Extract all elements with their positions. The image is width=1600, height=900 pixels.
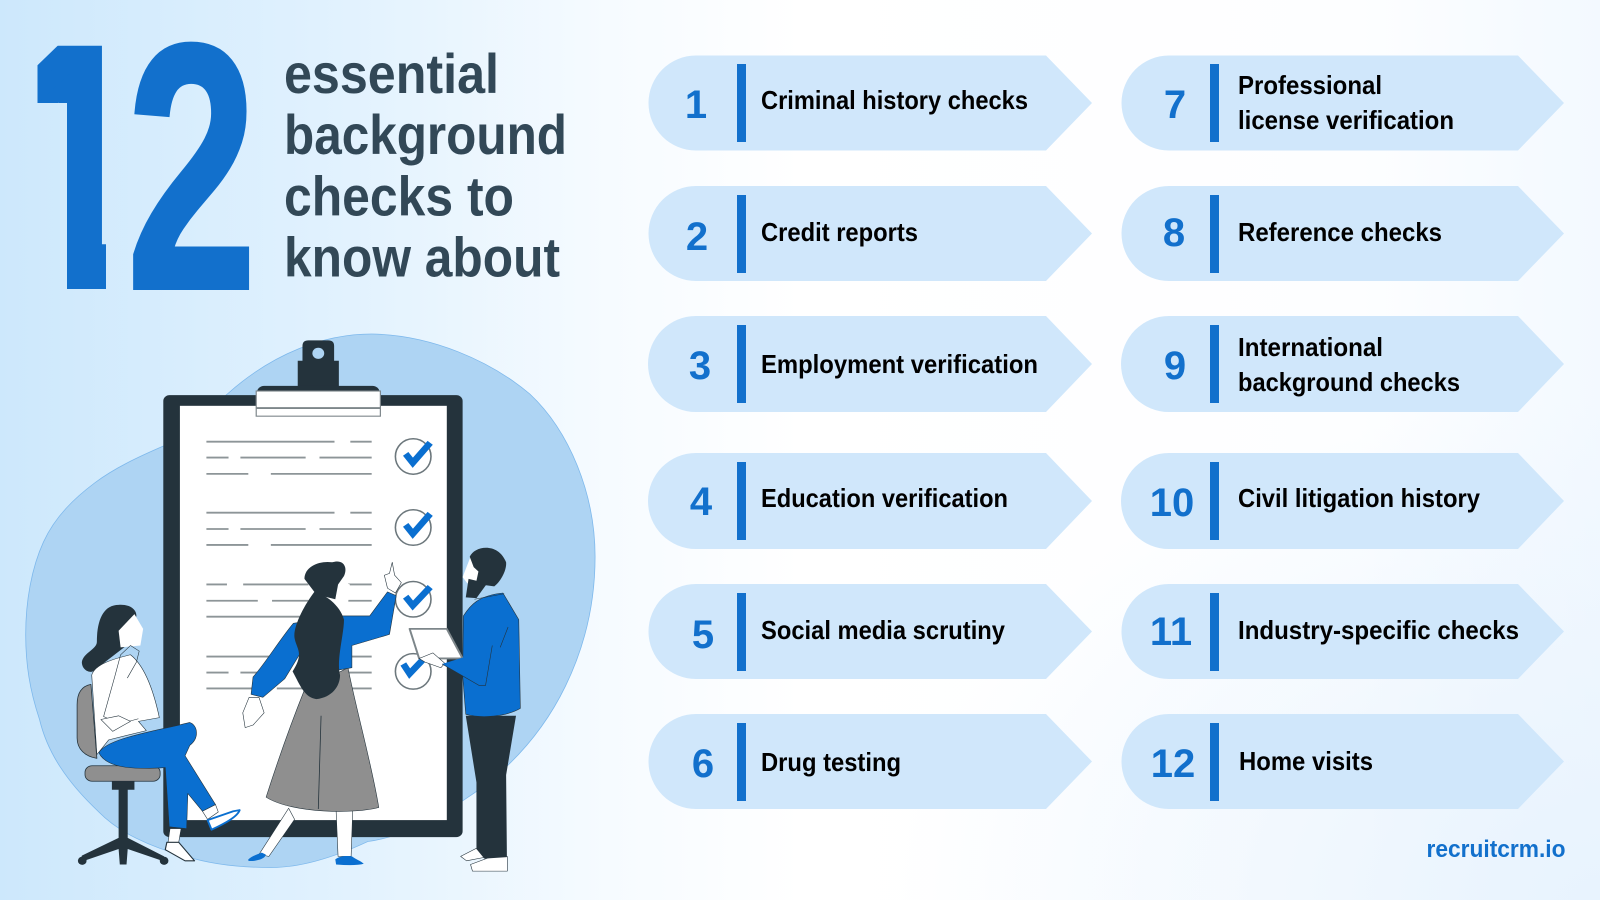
item 8 xyxy=(1122,186,1564,281)
item 2: Credit reports xyxy=(761,217,918,247)
checklist text lines xyxy=(206,442,372,688)
item 6: Drug testing xyxy=(761,747,901,777)
item 10: Civil litigation history xyxy=(1238,483,1480,513)
item 5 xyxy=(648,584,1092,679)
item 7: Professional xyxy=(1238,70,1382,100)
item 2: 2 xyxy=(686,215,708,259)
item 10 xyxy=(1121,453,1564,549)
item 12 xyxy=(1122,714,1564,809)
item 11 xyxy=(1122,584,1564,679)
item 9: International xyxy=(1238,332,1383,362)
item 7: 7 xyxy=(1164,83,1186,127)
icon: check marks xyxy=(395,439,431,689)
clipboard board xyxy=(163,395,463,837)
item 6 xyxy=(648,714,1092,809)
item 3 xyxy=(648,316,1092,412)
item 8: 8 xyxy=(1163,211,1185,255)
item 3: Employment verification xyxy=(761,349,1038,379)
item 2 xyxy=(648,186,1092,281)
title: checks to xyxy=(284,164,514,228)
item 5: Social media scrutiny xyxy=(761,615,1005,645)
person: standing woman pointing xyxy=(243,561,401,865)
item 5: 5 xyxy=(692,613,714,657)
item 1 xyxy=(648,56,1092,150)
title: background xyxy=(284,103,567,166)
person: seated woman on chair xyxy=(77,605,240,865)
item 3: 3 xyxy=(689,344,711,388)
big number 12 xyxy=(38,42,250,290)
item 4: Education verification xyxy=(761,483,1008,513)
item 8: Reference checks xyxy=(1238,217,1442,247)
brand url: recruitcrm.io xyxy=(1426,836,1566,863)
title: know about xyxy=(284,226,560,288)
item 11: Industry-specific checks xyxy=(1238,615,1519,645)
item 12: Home visits xyxy=(1239,746,1373,776)
item 12: 12 xyxy=(1151,742,1195,786)
item 7: license verification xyxy=(1238,105,1454,135)
chair xyxy=(77,684,168,865)
item 4 xyxy=(648,453,1092,549)
item 7 xyxy=(1122,56,1564,150)
item 9 xyxy=(1121,316,1564,412)
panel: check list right column xyxy=(1121,56,1564,809)
clipboard clip xyxy=(256,340,380,416)
item 4: 4 xyxy=(690,480,713,524)
background blob xyxy=(26,334,595,867)
item 10: 10 xyxy=(1150,481,1194,525)
item 11: 11 xyxy=(1150,610,1192,654)
item 9: 9 xyxy=(1164,344,1186,388)
panel: check list left column xyxy=(648,56,1092,809)
title xyxy=(284,42,567,288)
item 6: 6 xyxy=(692,742,714,786)
person: standing man with tablet xyxy=(410,548,520,871)
item 1: 1 xyxy=(685,83,707,127)
item 1: Criminal history checks xyxy=(761,85,1028,115)
item 9: background checks xyxy=(1238,367,1460,397)
illustration: team reviewing checklist xyxy=(26,334,595,871)
title: essential xyxy=(284,42,499,105)
